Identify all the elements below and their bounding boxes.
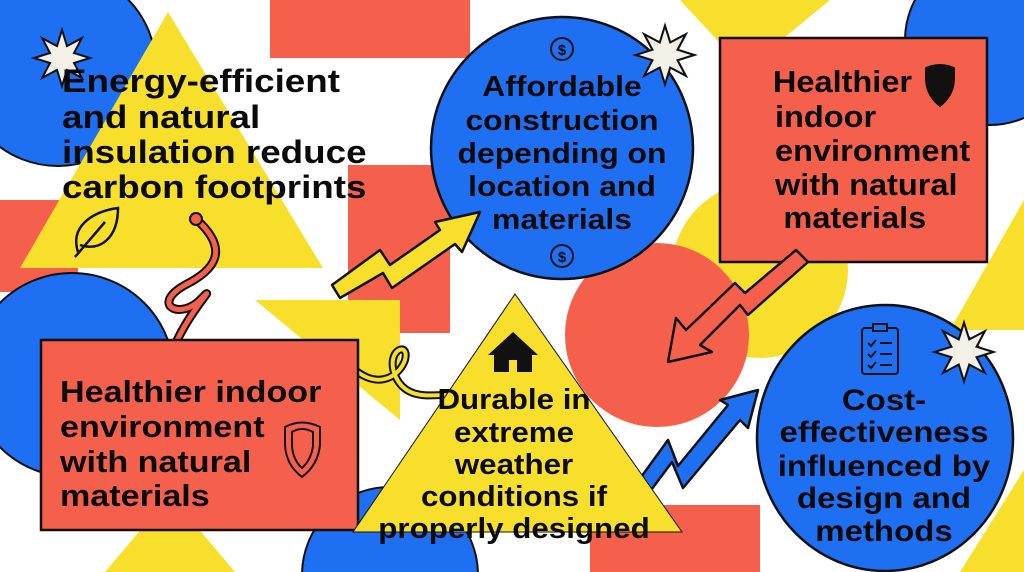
icon: house (488, 332, 538, 372)
panel: energy-efficient: Energy-efficient (62, 64, 341, 99)
panel: affordable (blue circle): construction (465, 104, 659, 137)
panel: healthier (top right box): Healthier (773, 64, 912, 99)
panel: durable (triangle): conditions if (421, 481, 608, 513)
panel: cost-effectiveness (blue ellipse): effectiveness (780, 414, 988, 449)
panel: healthier (bottom left box): Healthier indoor (60, 374, 322, 409)
panel: healthier (bottom left box) (41, 340, 358, 530)
panel: affordable (blue circle): Affordable (482, 70, 642, 103)
panel: healthier (top right box) (720, 38, 987, 262)
icon: leaf (75, 208, 118, 257)
panel: healthier (top right box): environment (775, 133, 971, 168)
panel: healthier (top right box): indoor (775, 99, 876, 134)
squiggle red (169, 213, 216, 345)
panel: cost-effectiveness (blue ellipse): influenced by (778, 448, 991, 483)
panel: durable (triangle): properly designed (378, 513, 650, 545)
panel: affordable (blue circle): materials (492, 203, 632, 236)
panel: healthier (top right box): materials (783, 200, 926, 235)
panel: cost-effectiveness (blue ellipse): Cost- (842, 382, 926, 417)
icon: shield filled (926, 65, 954, 106)
panel: energy-efficient: and natural (62, 100, 260, 135)
arrow: yellow up-right (332, 212, 480, 298)
panel: energy-efficient: insulation reduce (62, 135, 367, 170)
panel: healthier (bottom left box): environment (60, 409, 265, 444)
panel: healthier (top right box): with natural (774, 167, 958, 202)
icon: dollar bottom (551, 245, 573, 267)
icon: shield outline (285, 422, 320, 477)
panel: cost-effectiveness (blue ellipse): methods (815, 513, 953, 548)
arrow: blue up-right (628, 390, 758, 505)
icon: starburst (636, 26, 694, 84)
panel: durable (triangle): Durable in (437, 384, 591, 416)
panel: healthier (bottom left box): materials (60, 478, 210, 513)
panel: durable (triangle): weather (454, 449, 573, 481)
panel: cost-effectiveness (blue ellipse): design and (797, 480, 971, 515)
panel: cost-effectiveness (blue ellipse) (757, 305, 1013, 571)
arrow: red down-left (668, 250, 808, 362)
panel: energy-efficient (34, 30, 367, 257)
panel: durable (triangle) (353, 294, 682, 545)
icon: dollar top (551, 38, 573, 60)
icon: clipboard (862, 324, 898, 374)
panel: affordable (blue circle) (431, 17, 694, 279)
panel: energy-efficient: carbon footprints (62, 170, 366, 205)
icon: dollar bottom: $ (558, 249, 567, 266)
panel: affordable (blue circle): depending on (458, 137, 666, 170)
squiggle yellow (355, 349, 445, 395)
icon: dollar top: $ (558, 42, 567, 59)
panel: durable (triangle): extreme (454, 417, 574, 449)
panel: affordable (blue circle): location and (468, 170, 656, 203)
icon: starburst (935, 323, 993, 381)
panel: healthier (bottom left box): with natural (59, 444, 251, 479)
icon: starburst (34, 30, 90, 86)
